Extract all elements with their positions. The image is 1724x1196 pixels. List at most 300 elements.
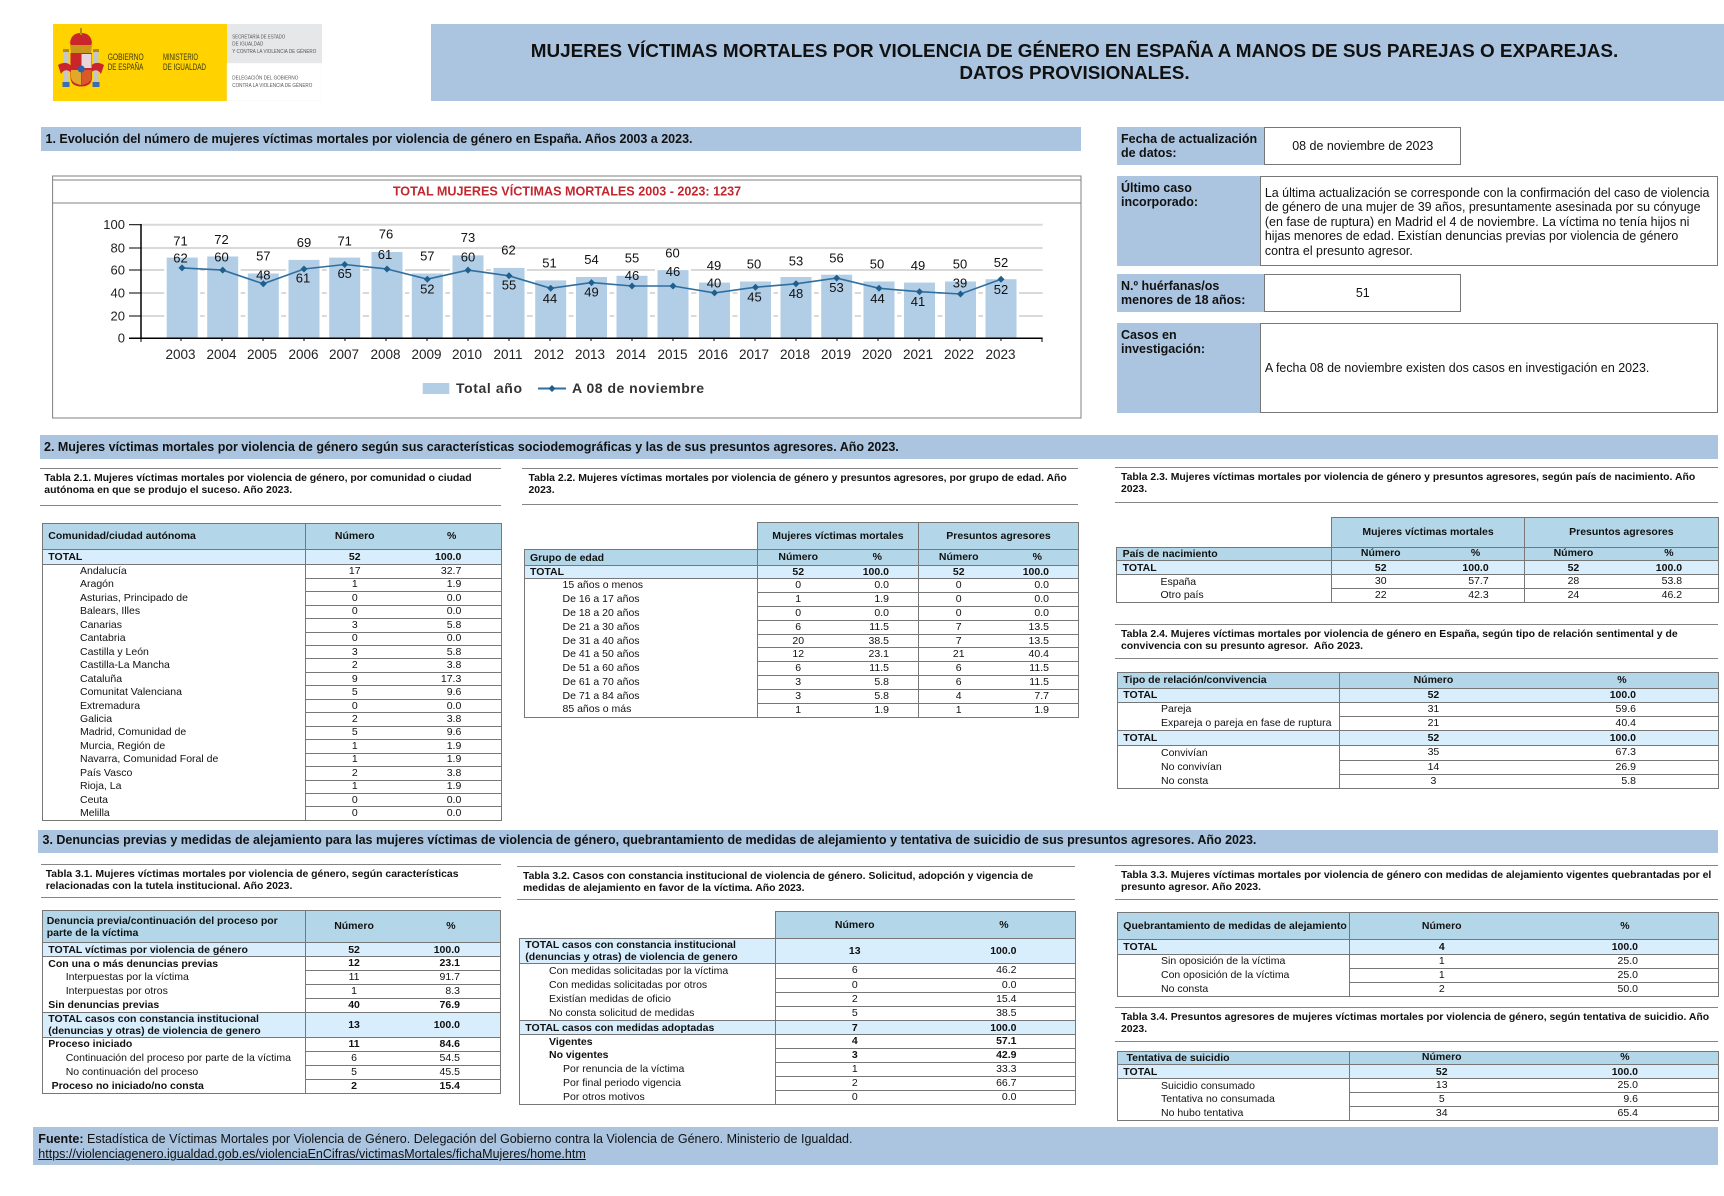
caption: tabla 2.3: 2023. [1121,484,1147,495]
november labels: 45 [747,289,762,304]
caption: tabla 3.2 [517,866,1075,900]
table 2.2: 5.8 [874,690,889,702]
table 3.1: (denuncias y otras) de violencia de genero [48,1025,261,1037]
table 3.2: 5 [852,1007,858,1019]
table 2.3: 52 [1568,562,1579,574]
table 2.2: De 41 a 50 años [562,648,640,660]
table 2.4: No consta [1161,775,1208,787]
table 2.2: 40.4 [1029,648,1049,660]
table 3.1: Proceso no iniciado/no consta [52,1080,204,1092]
table 3.3: No consta [1161,983,1208,995]
table 2.3: País de nacimiento [1123,548,1218,560]
table 2.2: De 61 a 70 años [562,676,640,688]
x axis labels: 2011 [493,347,523,362]
november labels: 65 [337,266,352,281]
table 3.1: 84.6 [440,1038,460,1050]
table 3.4: % [1620,1051,1630,1063]
caption: tabla 2.1: autónoma en que se produjo el suceso. Año 2023. [44,485,292,496]
november labels: 62 [173,250,188,265]
y axis labels: 100 [103,217,125,232]
icon: coat of arms [58,28,104,87]
table 3.4: Número [1422,1051,1462,1063]
table 2.2: 1 [956,704,962,716]
table 2.2: 7.7 [1034,690,1049,702]
table 3.1: 45.5 [440,1066,460,1078]
info: casos en investigación: Casos en [1121,328,1177,342]
table 2.1: 0 [352,605,358,617]
table 3.2: 46.2 [996,964,1016,976]
table 3.2: 7 [852,1022,858,1034]
info: casos en investigación: investigación: [1121,342,1205,356]
table 3.1: TOTAL víctimas por violencia de género [48,944,248,956]
table 2.2: 6 [956,662,962,674]
table 2.2: 0.0 [1034,579,1049,591]
table 2.1: 9 [352,673,358,685]
table 3.2: 3 [852,1049,858,1061]
table 3.2: Existían medidas de oficio [549,993,671,1005]
table 3.4: 13 [1436,1079,1448,1091]
table 2.2: De 21 a 30 años [562,621,640,633]
table 3.2: 4 [852,1035,858,1047]
info: último caso incorporado [1117,176,1718,266]
table 2.2: 6 [956,676,962,688]
table 2.4: 26.9 [1616,761,1636,773]
november labels: 55 [502,277,516,292]
table 2.2: 100.0 [1023,566,1049,578]
table 2.3: España [1160,576,1196,588]
table 2.2: 7 [956,634,962,646]
caption: tabla 2.4: convivencia con su presunto agresor. Año 2023. [1121,641,1363,652]
chart legend [423,380,704,396]
table 3.3: Con oposición de la víctima [1161,969,1289,981]
table 2.1: 0 [352,794,358,806]
table 2.1: 17.3 [441,673,461,685]
table 2.2: Número [778,551,818,563]
table 3.4: 25.0 [1618,1079,1638,1091]
november labels: 41 [911,294,925,309]
table 3.3: 1 [1439,955,1445,967]
table 3.3: Número [1422,920,1462,932]
info: huérfanas: 51 [1356,286,1370,300]
table 2.3: 42.3 [1468,589,1489,601]
logo secretary text: SECRETARÍA DE ESTADO [232,33,286,40]
november labels: 49 [584,285,599,300]
total labels: 49 [707,258,721,273]
caption: tabla 2.2 [522,468,1078,505]
table 2.1: 0.0 [447,700,461,712]
table 2.2: 0.0 [1034,607,1049,619]
section 2 heading [40,435,1718,459]
table 2.1: 3.8 [447,659,461,671]
total labels: 50 [747,257,761,272]
table 2.2: 0.0 [1034,593,1049,605]
table 3.1: 54.5 [440,1052,460,1064]
table 2.2: 0 [795,579,801,591]
table 2.2: 3 [795,690,801,702]
x axis labels: 2022 [944,347,974,362]
table 3.1: 100.0 [434,944,460,956]
table 3.2: Por final periodo vigencia [563,1077,681,1089]
november labels: 39 [953,275,967,290]
info: último caso incorporado: (en fase de ruptura) en Madrid el 4 de noviembre. La víctima no tenía hijos ni [1265,215,1689,229]
caption: tabla 2.3 [1115,467,1718,503]
x axis labels: 2009 [411,347,442,362]
table 2.2: 0 [956,593,962,605]
table 3.2: 66.7 [996,1077,1016,1089]
x axis labels: 2017 [739,347,769,362]
x axis labels: 2013 [575,347,605,362]
table 2.2: % [1033,551,1042,563]
table 3.1: Continuación del proceso por parte de la víctima [66,1052,291,1064]
caption: tabla 3.4: Tabla 3.4. Presuntos agresores de mujeres víctimas mortales por violencia de género, según tentativa de suicidio. Año [1121,1012,1709,1023]
info: fecha de actualización [1117,127,1461,165]
table 2.1: 1.9 [447,740,461,752]
table 2.4: 5.8 [1621,775,1636,787]
table 2.1: 1 [352,740,358,752]
table 3.2: Por renuncia de la víctima [563,1063,684,1075]
table 2.2: 1.9 [874,593,889,605]
table 2.1: 0.0 [447,794,461,806]
table 2.1: Extremadura [80,700,140,712]
table 2.1: Melilla [80,807,110,819]
table 2.1: 0 [352,807,358,819]
caption: tabla 3.4: 2023. [1121,1024,1147,1035]
x axis labels: 2008 [370,347,401,362]
table 2.1: Madrid, Comunidad de [80,726,186,738]
november labels: 44 [543,291,557,306]
table 2.3: % [1664,547,1674,559]
table 2.1: 0.0 [447,605,461,617]
table 3.4: Tentativa de suicidio [1126,1052,1230,1064]
table 2.2: 6 [795,662,801,674]
table 3.1: 6 [351,1052,357,1064]
table 2.2: 0.0 [874,607,889,619]
panel: line and bar chart [52,176,1082,418]
table 2.1: 1.9 [447,578,461,590]
november labels: 61 [378,247,392,262]
table 2.2: 100.0 [863,566,889,578]
caption: tabla 2.4 [1115,624,1718,658]
table 2.2: De 71 a 84 años [562,690,640,702]
table 2.1: 5.8 [447,646,461,658]
table 2.1: Castilla y León [80,646,149,658]
table 3.4: 100.0 [1612,1066,1638,1078]
x axis labels: 2014 [616,347,647,362]
total labels: 52 [994,255,1008,270]
table 2.2: De 51 a 60 años [562,662,640,674]
table 2.2: De 31 a 40 años [562,634,640,646]
table 2.2: 11.5 [869,621,889,633]
info: huérfanas [1117,274,1461,312]
table 2.2: % [873,551,882,563]
x axis labels: 2016 [698,347,728,362]
caption: tabla 3.4 [1115,1007,1718,1042]
table 3.4: 65.4 [1618,1107,1638,1119]
x axis labels: 2003 [165,347,196,362]
table 3.2: 0.0 [1002,1091,1016,1103]
table 2.2: Mujeres víctimas mortales [772,530,904,542]
table 3.3: Quebrantamiento de medidas de alejamiento [1123,920,1347,932]
table 3.3: 4 [1439,941,1445,953]
table 2.1: TOTAL [48,551,82,563]
title banner: DATOS PROVISIONALES. [959,63,1190,84]
total labels: 53 [789,254,803,269]
table 3.1: % [446,920,456,932]
table 2.1: Castilla-La Mancha [80,659,170,671]
table 2.1: 9.6 [447,726,461,738]
table 2.4: Pareja [1161,703,1191,715]
y axis labels: 80 [111,240,125,255]
table 3.4: No hubo tentativa [1161,1107,1243,1119]
table 2.2: 38.5 [869,634,889,646]
table 2.1: % [447,530,456,542]
table 2.1 [42,523,502,821]
table 3.2: 100.0 [990,1022,1016,1034]
november labels [173,247,1008,309]
table 3.2: 57.1 [996,1035,1016,1047]
table 3.1: Denuncia previa/continuación del proceso por [47,915,278,927]
table 3.2: 15.4 [996,993,1016,1005]
table 2.4: TOTAL [1123,732,1157,744]
total labels [173,227,1008,273]
table 3.1: Sin denuncias previas [48,999,159,1011]
logo text: DE IGUALDAD [163,62,206,72]
section 3 heading: 3. Denuncias previas y medidas de alejamiento para las mujeres víctimas de violencia de género, quebrantamiento de medidas de alejamiento y tentativa de suicidio de sus presuntos agresores. Año 2023. [42,833,1256,847]
table 2.1: Cantabria [80,632,126,644]
section 3 heading [38,830,1718,853]
total labels: 55 [625,250,639,265]
total labels: 57 [256,249,271,264]
total labels: 54 [584,252,599,267]
table 2.4: 21 [1428,717,1439,729]
table 2.3: Número [1554,547,1593,559]
x axis labels: 2021 [903,347,933,362]
table 2.2: 3 [795,676,801,688]
table 2.1: 32.7 [441,565,461,577]
table 2.1: País Vasco [80,767,132,779]
table 2.1: 0 [352,592,358,604]
table 3.1: 12 [348,957,360,969]
table 2.4: 100.0 [1610,689,1636,701]
info: último caso incorporado: contra el presunto agresor. [1265,244,1413,258]
table 3.1: 52 [348,944,360,956]
table 3.3: 100.0 [1612,941,1638,953]
table 3.3: % [1620,920,1630,932]
table 3.1: TOTAL casos con constancia institucional [48,1013,259,1025]
table 2.3: 22 [1375,589,1387,601]
table 2.1: Balears, Illes [80,605,140,617]
table 2.4: Expareja o pareja en fase de ruptura [1161,717,1331,729]
caption: tabla 3.1: relacionadas con la tutela institucional. Año 2023. [46,880,292,892]
caption: tabla 2.3: Tabla 2.3. Mujeres víctimas mortales por violencia de género y presuntos agresores, según país de nacimiento. Año [1121,472,1695,483]
table 3.2: 0 [852,979,858,991]
november labels: 52 [994,282,1008,297]
table 2.2: 23.1 [869,648,889,660]
table 2.3: 30 [1375,575,1387,587]
table 3.2: 6 [852,964,858,976]
table 3.2: 13 [849,945,861,957]
table 2.3: 100.0 [1462,562,1489,574]
info: último caso incorporado: Último caso [1121,181,1192,195]
table 3.4: 52 [1436,1066,1448,1078]
logo secretary text [232,33,317,89]
table 2.4: Convivían [1161,747,1208,759]
table 3.4: 5 [1439,1093,1445,1105]
table 3.1: Interpuestas por la víctima [66,971,189,983]
caption: tabla 2.2: 2023. [528,485,555,496]
table 2.1: 1 [352,780,358,792]
y axis labels: 20 [111,308,125,324]
table 2.3: 57.7 [1468,575,1489,587]
table 3.1: Proceso iniciado [48,1038,132,1050]
table 2.3: 52 [1375,562,1387,574]
total labels: 50 [870,257,884,272]
table 3.2: No consta solicitud de medidas [549,1007,694,1019]
x axis labels: 2004 [206,347,237,362]
x axis labels: 2020 [862,347,892,362]
table 3.3 [1117,912,1719,997]
y axis labels: 0 [118,330,125,345]
table 2.1: Murcia, Región de [80,740,165,752]
table 2.2: 15 años o menos [562,579,643,591]
table 2.2: 11.5 [869,662,889,674]
table 3.2: Por otros motivos [563,1091,645,1103]
table 2.1: Andalucía [80,565,127,577]
table 2.3: % [1471,547,1480,559]
table 2.4: 52 [1428,732,1439,744]
table 2.2: 0 [795,607,801,619]
total labels: 76 [379,227,393,242]
table 2.4: 59.6 [1616,703,1636,715]
x axis labels: 2018 [780,347,810,362]
table 3.2: % [999,919,1009,931]
bars: total año [167,252,1016,338]
table 2.3: 100.0 [1656,562,1682,574]
table 2.3: Mujeres víctimas mortales [1362,526,1494,538]
table 3.2: Con medidas solicitadas por la víctima [549,965,728,977]
table 2.1: Aragón [80,578,114,590]
x axis labels: 2007 [329,347,359,362]
table 3.3: 2 [1439,983,1445,995]
caption: tabla 3.3: Tabla 3.3. Mujeres víctimas mortales por violencia de género con medidas de alejamiento vigentes quebrantadas por el [1121,870,1711,881]
table 2.1: 2 [352,659,358,671]
y axis labels: 40 [111,286,125,300]
table 2.1: 17 [349,565,361,577]
table 2.3: 24 [1568,589,1579,601]
total labels: 51 [542,255,557,270]
total labels: 73 [461,230,475,245]
table 2.1: 100.0 [435,551,461,563]
title banner [431,24,1724,101]
logo text: GOBIERNO [108,52,144,62]
table 2.2: 0.0 [874,579,889,591]
table 3.4: Tentativa no consumada [1161,1093,1275,1105]
table 2.3: Presuntos agresores [1569,526,1674,538]
caption: tabla 3.1: Tabla 3.1. Mujeres víctimas mortales por violencia de género, según características [46,868,459,880]
table 2.2: 1.9 [874,704,889,716]
footer source: Fuente: Estadística de Víctimas Mortales por Violencia de Género. Delegación del Gobierno contra la Violencia de Género. Ministerio de Igualdad. [38,1132,852,1146]
table 3.1: 23.1 [440,957,460,969]
table 2.1: 3.8 [447,713,461,725]
table 3.2: 0 [852,1091,858,1103]
info: casos en investigación: A fecha 08 de noviembre existen dos casos en investigación en 2023. [1265,361,1649,375]
table 3.4: 34 [1436,1107,1448,1119]
info: huérfanas: menores de 18 años: [1121,293,1245,307]
info: último caso incorporado: de género de una mujer de 39 años, presuntamente asesinada por su cónyuge [1265,200,1701,214]
table 3.3: 25.0 [1618,969,1638,981]
footer source [33,1127,1718,1165]
table 2.3: 53.8 [1662,575,1682,587]
table 2.3 [1116,517,1719,603]
x axis labels: 2019 [821,347,851,362]
table 3.3: Sin oposición de la víctima [1161,955,1285,967]
table 3.4: TOTAL [1123,1066,1157,1078]
table 2.4 [1117,672,1719,789]
info: fecha de actualización: Fecha de actualización [1121,132,1257,146]
table 2.2: De 18 a 20 años [562,607,640,619]
november labels: 61 [296,270,310,285]
table 2.1: 1 [352,578,358,590]
table 2.2: 1.9 [1034,704,1049,716]
x axis labels: 2012 [534,347,564,362]
november labels: 52 [420,281,435,296]
table 2.2: 1 [795,593,801,605]
table 2.4: 67.3 [1616,746,1636,758]
table 2.2: 1 [795,704,801,716]
november labels: 60 [461,249,475,264]
table 2.2: 5.8 [874,676,889,688]
x axis labels [165,347,1016,362]
table 3.4: 9.6 [1623,1093,1638,1105]
table 3.2: Con medidas solicitadas por otros [549,979,707,991]
table 2.4: 100.0 [1610,732,1636,744]
chart legend: A 08 de noviembre [572,380,704,396]
info: último caso incorporado: hijas menores de edad. Existían denuncias previas por violencia de género [1265,229,1678,243]
table 3.1: Número [334,920,374,932]
total labels: 57 [420,249,435,264]
table 3.2: 0.0 [1002,979,1016,991]
table 2.1: 5.8 [447,619,461,631]
logo secretary text: DELEGACIÓN DEL GOBIERNO [232,75,299,82]
table 3.2: 2 [852,993,858,1005]
november labels: 40 [707,275,721,290]
logo text [108,52,206,72]
table 3.2: Vigentes [549,1036,593,1048]
table 2.1: 3 [352,619,358,631]
table 2.1: Comunitat Valenciana [80,686,182,698]
table 2.1: 5 [352,726,358,738]
november labels: 53 [829,280,844,295]
caption: tabla 2.2: Tabla 2.2. Mujeres víctimas mortales por violencia de género y presuntos agresores, por grupo de edad. Año [528,473,1067,484]
footer source: https://violenciagenero.igualdad.gob.es/violenciaEnCifras/victimasMortales/fichaMujeres/home.htm [38,1147,586,1161]
table 2.2: TOTAL [530,566,564,578]
table 2.2: 4 [956,690,962,702]
info: huérfanas: N.º huérfanas/os [1121,279,1219,293]
chart title: TOTAL MUJERES VÍCTIMAS MORTALES 2003 - 2023: 1237 [393,184,741,198]
table 2.1: 1 [352,753,358,765]
november labels: 60 [214,249,229,264]
table 2.1: 2 [352,767,358,779]
table 3.3: TOTAL [1123,941,1157,953]
table 3.4: Suicidio consumado [1161,1080,1255,1092]
table 2.1: 52 [349,551,361,563]
table 2.2: 85 años o más [562,703,631,715]
table 3.2: No vigentes [549,1049,609,1061]
y axis labels [103,217,125,345]
total labels: 60 [665,245,680,260]
table 2.2: 12 [792,648,804,660]
logo: Gobierno de España, Ministerio de Igualdad [53,24,322,101]
